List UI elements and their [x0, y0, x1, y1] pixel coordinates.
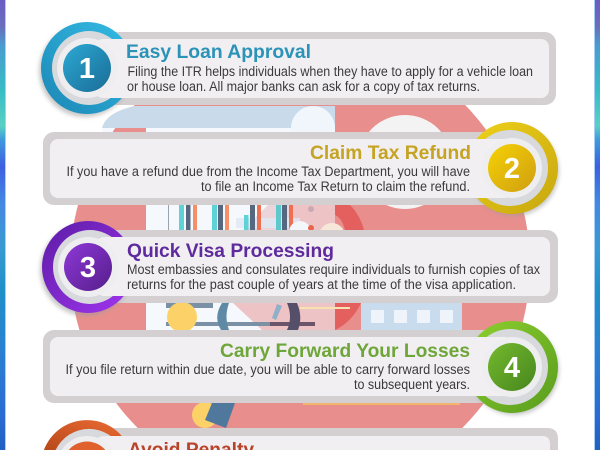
- pink circle: [70, 35, 530, 450]
- panel 5: Avoid Penalty: [44, 420, 558, 450]
- icon: badge 1: 1: [79, 53, 95, 85]
- small decorative circles: [289, 206, 345, 249]
- panel 1 body: Filing the ITR helps individuals when they have to apply for a vehicle loan: [128, 64, 533, 79]
- panel 4 body: If you file return within due date, you will be able to carry forward losses: [66, 362, 470, 377]
- white circle: [358, 115, 452, 209]
- background illustration: [70, 35, 530, 450]
- panel 4 heading: Carry Forward Your Losses: [220, 340, 470, 362]
- panel 4 body: to subsequent years.: [354, 377, 470, 392]
- icon: badge 2: [50, 122, 559, 216]
- yellow coin: [167, 302, 197, 332]
- panel 3 body: Most embassies and consulates require individuals to furnish copies of tax: [127, 262, 540, 277]
- panel 5 frame: [60, 428, 558, 450]
- panel 3 heading: Quick Visa Processing: [127, 240, 334, 262]
- panel 4: Carry Forward Your Losses: [43, 321, 559, 415]
- bar chart strip: [168, 205, 293, 230]
- side bar: right: [594, 0, 600, 450]
- panel 2: Claim Tax Refund: [43, 122, 559, 216]
- panel 3 body: returns for the past couple of years at the time of the visa application.: [127, 277, 516, 292]
- red triangle lower: [335, 303, 361, 330]
- panel 1 body: [127, 64, 533, 94]
- panel 1 heading: Easy Loan Approval: [126, 41, 311, 63]
- light blue panel with squares: [361, 303, 462, 330]
- side bar: left: [0, 0, 6, 450]
- icon: badge 5 (cropped by page edge): [44, 420, 550, 450]
- panel 2 body: to file an Income Tax Return to claim the refund.: [201, 179, 470, 194]
- icon: badge 3: [40, 221, 550, 316]
- panel 2 frame: [43, 132, 533, 205]
- panel 1 body: or house loan. All major banks can ask for a copy of tax returns.: [127, 79, 480, 94]
- panel 3 body: [127, 262, 540, 292]
- icon: badge 4: 4: [504, 352, 520, 384]
- icon: badge 2: 2: [504, 153, 520, 185]
- panel 1 frame: [60, 32, 556, 105]
- translucent pink overlay upper: [236, 205, 335, 230]
- icon: badge 3: 3: [80, 252, 96, 284]
- lower coin and blue tag: [192, 402, 460, 428]
- panel 3: Quick Visa Processing: [40, 221, 558, 316]
- icon: badge 1: [39, 22, 549, 117]
- gauge lines and arcs: [166, 303, 350, 330]
- panel 3 frame: [60, 230, 558, 303]
- panel 4 frame: [43, 330, 533, 403]
- translucent pink overlay lower: [233, 303, 335, 330]
- panel 2 body: If you have a refund due from the Income Tax Department, you will have: [66, 164, 470, 179]
- red quadrant upper: [335, 205, 364, 230]
- panel 4 body: [66, 362, 470, 392]
- icon: badge 4: [50, 321, 559, 415]
- pale blue header shape: [102, 106, 335, 128]
- panel 2 heading: Claim Tax Refund: [310, 142, 471, 164]
- panel 1: Easy Loan Approval: [39, 22, 556, 117]
- light window body: [102, 106, 335, 330]
- panel 2 body: [66, 164, 470, 194]
